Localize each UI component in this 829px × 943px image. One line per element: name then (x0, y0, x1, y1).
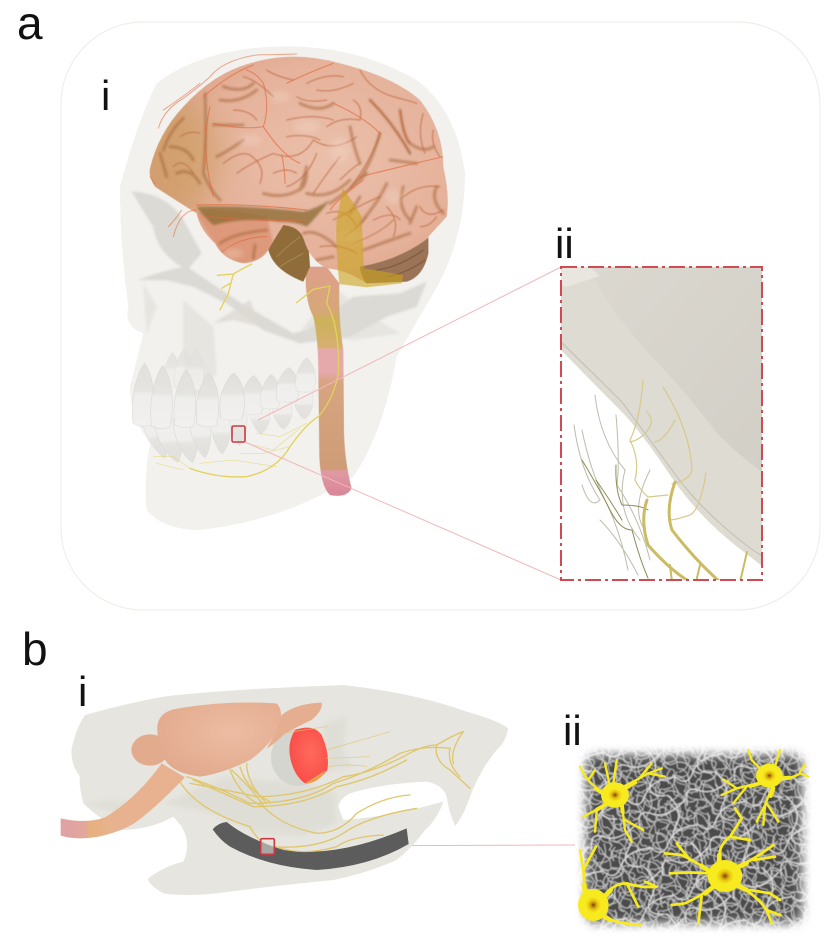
deep sulci (160, 83, 443, 260)
heading: b: b (22, 623, 48, 675)
internal bone shading (83, 717, 353, 837)
external vessels above brain (150, 54, 297, 237)
skull silhouette (71, 685, 508, 895)
inset frame (561, 267, 762, 580)
label: a ii: ii (555, 220, 574, 267)
jaw bone surface (561, 267, 762, 566)
teeth (132, 349, 315, 464)
temporal groove shadow (197, 200, 330, 227)
highlights on gyri (223, 91, 403, 258)
cranial nerves (153, 264, 339, 477)
neurons (578, 750, 808, 925)
label: b ii: ii (563, 707, 582, 754)
neuron top left (580, 760, 665, 842)
upper front teeth (132, 363, 154, 426)
main nerve trunks (644, 482, 747, 582)
translucent head silhouette (120, 46, 465, 530)
cerebrum (157, 702, 281, 777)
brain (140, 54, 448, 287)
label: b i: i (78, 668, 87, 715)
cortical vessels (197, 63, 443, 253)
rat skull illustration (61, 685, 508, 895)
neuron top right (722, 750, 808, 825)
spinal cord (306, 267, 352, 496)
inset a ii (561, 267, 762, 582)
spinal cord (61, 763, 185, 838)
cerebellum (131, 734, 169, 766)
fine nerve branches (574, 395, 650, 575)
ochre shading on frontal lobe (140, 100, 220, 213)
lower teeth (140, 410, 174, 460)
human head illustration (120, 46, 465, 530)
zoom connector lines (245, 267, 575, 846)
upper molars (241, 375, 264, 414)
neuron bottom left (578, 847, 657, 925)
region marker (261, 839, 274, 854)
panel a background (61, 22, 820, 610)
cerebellum (268, 220, 310, 282)
nerve over incisor (277, 847, 337, 852)
right lower cerebellar shadow (360, 237, 430, 285)
region marker on human tooth (232, 426, 245, 442)
temporal lobe tint (197, 211, 273, 263)
olfactory bulb (267, 703, 322, 748)
neuron micrograph (578, 747, 810, 931)
fine sulci (173, 70, 443, 253)
trigeminal nerve branches (180, 727, 470, 852)
eye (271, 728, 328, 786)
neuron centre (665, 808, 780, 923)
fibre network (578, 747, 810, 931)
far side teeth (164, 349, 204, 390)
skull bones (132, 192, 427, 397)
label: a i: i (101, 72, 110, 119)
incisor (213, 822, 409, 870)
yellow translucent nerve tract (336, 188, 403, 287)
